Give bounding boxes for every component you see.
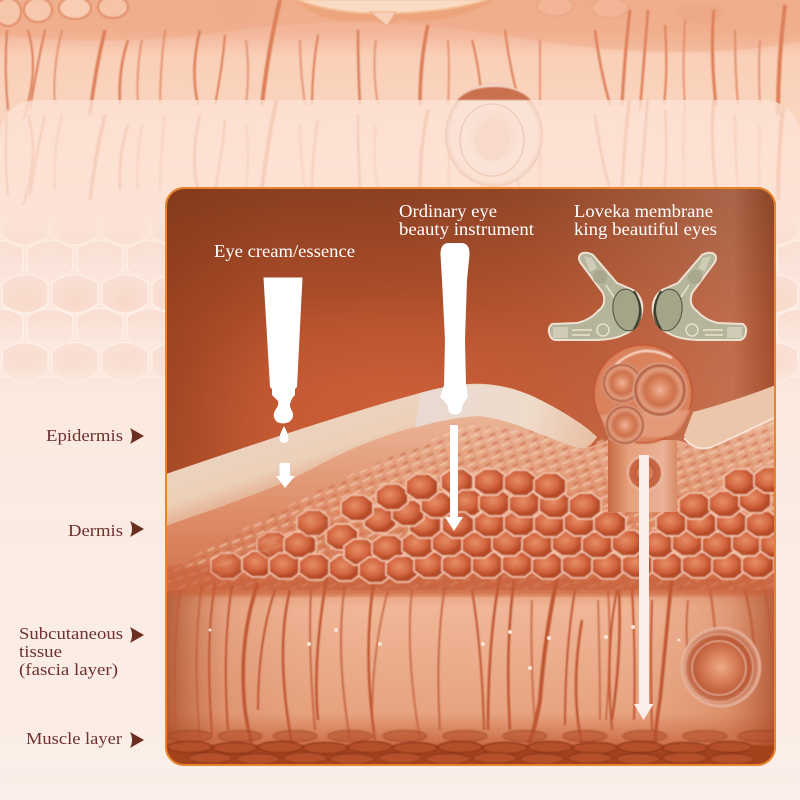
muscle layer — [166, 730, 782, 766]
label: subcutaneous tissue — [19, 624, 144, 679]
icon: cream tube with drop — [264, 278, 302, 443]
arrow: instrument depth — [445, 425, 463, 531]
left patch — [549, 253, 644, 340]
dermis layer — [166, 413, 776, 600]
icon: Loveka eye patches — [549, 253, 746, 340]
heading: Loveka — [574, 201, 717, 239]
label: epidermis: Epidermis — [46, 426, 123, 445]
epidermis band — [166, 384, 776, 526]
heading: eye cream: Eye cream/essence — [214, 241, 355, 261]
right patch — [651, 253, 746, 340]
top centre ornament — [295, 0, 495, 26]
icon: ordinary instrument — [440, 243, 470, 414]
label: dermis: Dermis — [68, 521, 123, 540]
floating droplet — [445, 83, 543, 187]
penetration column — [608, 440, 677, 512]
heading: Loveka: Loveka membrane — [574, 201, 713, 221]
arrow: cream depth — [276, 463, 295, 488]
subcutaneous layer fibres — [166, 565, 775, 766]
honeycomb cells — [211, 467, 792, 583]
active ingredient bubble — [594, 345, 692, 445]
heading: Loveka: king beautiful eyes — [574, 219, 717, 239]
heading: ordinary instrument — [399, 201, 534, 239]
label: subcutaneous tissue: (fascia layer) — [19, 660, 118, 679]
label: muscle layer: Muscle layer — [26, 729, 122, 748]
arrow: Loveka depth — [634, 455, 654, 720]
top skin strip — [0, 0, 800, 400]
translucent backdrop panel — [0, 100, 800, 442]
panel: skin cross-section — [165, 187, 792, 766]
label: subcutaneous tissue: tissue — [19, 642, 62, 661]
small bubble in column — [628, 456, 662, 490]
label: dermis — [68, 521, 144, 540]
label: subcutaneous tissue: Subcutaneous — [19, 624, 123, 643]
heading: ordinary instrument: beauty instrument — [399, 219, 534, 239]
large bubble lower right — [681, 627, 761, 707]
heading: ordinary instrument: Ordinary eye — [399, 201, 497, 221]
